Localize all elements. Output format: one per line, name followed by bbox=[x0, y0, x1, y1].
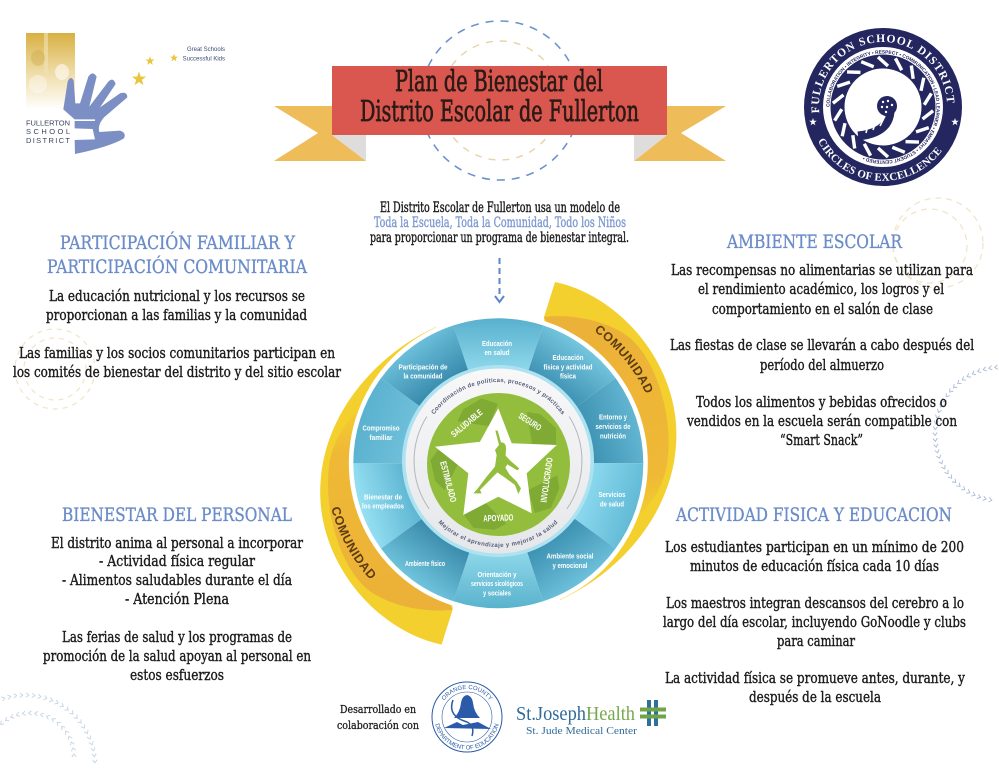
segment labels: y emocional bbox=[552, 561, 588, 570]
body text: “Smart Snack” bbox=[780, 431, 863, 449]
green circle bbox=[427, 393, 570, 536]
tagline: Successful Kids bbox=[183, 56, 225, 62]
body text: estos esfuerzos bbox=[130, 666, 224, 684]
segment labels: la comunidad bbox=[404, 372, 443, 380]
banner bbox=[332, 66, 667, 135]
segment labels: servicios de bbox=[596, 422, 630, 431]
icon: jumping figure bbox=[473, 431, 521, 494]
intro text: Toda la Escuela, Toda la Comunidad, Todo los Niños bbox=[374, 215, 626, 231]
star bbox=[435, 408, 557, 515]
segment labels: física bbox=[560, 372, 577, 380]
body text: los comités de bienestar del distrito y del sitio escolar bbox=[13, 363, 342, 381]
chart: wellness wheel bbox=[320, 282, 676, 645]
body text: Las ferias de salud y los programas de bbox=[62, 628, 292, 646]
tagline bbox=[183, 47, 225, 62]
title: Plan de Bienestar del bbox=[395, 64, 603, 98]
segment labels: en salud bbox=[484, 348, 510, 357]
district name: FULLERTON bbox=[26, 118, 70, 128]
title bbox=[360, 64, 639, 128]
credit text: colaboración con bbox=[337, 718, 419, 732]
segment labels: Ambiente social bbox=[546, 552, 594, 560]
body text: para caminar bbox=[777, 632, 856, 650]
credit text: Desarrollado en bbox=[340, 702, 416, 716]
segment labels: Compromiso bbox=[362, 424, 400, 432]
segment labels: nutrición bbox=[600, 432, 626, 440]
body text: comportamiento en el salón de clase bbox=[712, 300, 933, 318]
wheel segments bbox=[353, 318, 643, 608]
body text: La educación nutricional y los recursos se bbox=[49, 287, 305, 305]
segment labels: los empleados bbox=[362, 502, 404, 510]
body text: proporcionan a las familias y la comunidad bbox=[46, 306, 307, 324]
body text: promoción de la salud apoyan al personal en bbox=[43, 647, 311, 665]
swoosh: right bbox=[544, 282, 676, 600]
body text bbox=[663, 538, 966, 706]
logo: St. Joseph Health bbox=[516, 700, 666, 737]
icon: cross bbox=[640, 700, 666, 726]
logo: St. Joseph Health: St. Jude Medical Center bbox=[526, 725, 637, 737]
icon: hand bbox=[63, 73, 127, 154]
segment labels: Participación de bbox=[398, 362, 448, 372]
body text: Las familias y los socios comunitarios participan en bbox=[19, 344, 335, 362]
segment labels: servicios sicológicos bbox=[471, 579, 523, 588]
segment labels: Orientación y bbox=[478, 570, 517, 579]
heading: BIENESTAR DEL PERSONAL bbox=[62, 504, 292, 526]
heading: AMBIENTE ESCOLAR bbox=[726, 231, 903, 253]
seal stars bbox=[809, 118, 817, 125]
star labels: APOYADO bbox=[483, 512, 513, 524]
logo: seal Circles of Excellence bbox=[804, 28, 962, 186]
inner ring: Coordinación de políticas, procesos y prácticas bbox=[432, 378, 564, 414]
body text: - Actividad física regular bbox=[99, 552, 256, 570]
rope ring bbox=[833, 57, 933, 157]
star labels: INVOLUCRADO bbox=[539, 457, 555, 503]
segment labels: Ambiente físico bbox=[405, 559, 445, 568]
heading: PARTICIPACIÓN FAMILIAR Y bbox=[60, 231, 295, 254]
icon: bell bbox=[454, 695, 480, 718]
segment labels: Educación bbox=[482, 339, 512, 348]
title: Distrito Escolar de Fullerton bbox=[360, 94, 639, 128]
credit text bbox=[337, 702, 419, 732]
intro text bbox=[370, 200, 629, 246]
seal text bbox=[811, 34, 955, 181]
seal text: COLLABORATION • INTEGRITY • RESPECT • COMMUNICATION • LEAD LEARNER • EMPATHY • STUDENT CENTERED • bbox=[826, 50, 940, 164]
body text bbox=[43, 534, 311, 684]
star labels: SALUDABLE bbox=[449, 407, 484, 439]
district name: DISTRICT bbox=[26, 136, 70, 145]
segment labels: de salud bbox=[600, 500, 624, 508]
body text bbox=[670, 261, 974, 449]
panel: actividad fisica bbox=[663, 504, 966, 706]
district name: SCHOOL bbox=[26, 127, 70, 136]
ribbon tails bbox=[274, 106, 366, 161]
tagline: Great Schools bbox=[187, 47, 225, 53]
segment labels: Bienestar de bbox=[364, 492, 402, 502]
seal text: FULLERTON SCHOOL DISTRICT bbox=[811, 34, 955, 114]
intro text: para proporcionar un programa de bienestar integral. bbox=[370, 230, 629, 246]
body text bbox=[13, 287, 342, 381]
star labels: ESTIMULADO bbox=[438, 460, 459, 503]
intro text: El Distrito Escolar de Fullerton usa un modelo de bbox=[380, 200, 620, 216]
seal text: CIRCLES OF EXCELLENCE bbox=[819, 138, 942, 181]
segment labels: y sociales bbox=[483, 588, 511, 598]
arrow: down to wheel bbox=[495, 258, 504, 302]
district name bbox=[26, 118, 70, 145]
segment labels: Servicios bbox=[598, 490, 626, 499]
heading: PARTICIPACIÓN COMUNITARIA bbox=[47, 255, 307, 278]
body text: - Atención Plena bbox=[125, 590, 229, 608]
logo: Orange County Department of Education: ORANGE COUNTY bbox=[442, 684, 493, 700]
star labels bbox=[438, 407, 555, 524]
segment labels: Educación bbox=[552, 353, 584, 362]
logo: Orange County Department of Education bbox=[432, 682, 502, 752]
label: comunidad left: COMUNIDAD bbox=[332, 507, 376, 578]
inner ring: Mejorar el aprendizaje y mejorar la salud bbox=[438, 520, 558, 548]
panel: participacion familiar bbox=[13, 231, 342, 381]
star labels: SEGURO bbox=[517, 411, 543, 433]
segment labels bbox=[362, 339, 630, 598]
segment labels: Entorno y bbox=[599, 412, 628, 422]
body text: El distrito anima al personal a incorporar bbox=[51, 534, 304, 552]
swoosh: left bbox=[320, 327, 453, 645]
photo panel bbox=[26, 33, 75, 110]
body text: - Alimentos saludables durante el día bbox=[62, 571, 292, 589]
logo: St. Joseph Health: St.JosephHealth bbox=[516, 703, 635, 725]
inner ring bbox=[402, 365, 594, 557]
segment labels: familiar bbox=[370, 433, 393, 442]
body text: período del almuerzo bbox=[760, 356, 884, 374]
panel: ambiente escolar bbox=[670, 231, 974, 449]
label: comunidad right: COMUNIDAD bbox=[596, 326, 652, 392]
segment labels: física y actividad bbox=[544, 362, 593, 372]
title ribbon bbox=[274, 64, 726, 161]
logo: Orange County Department of Education: DEPARTMENT OF EDUCATION bbox=[435, 723, 499, 750]
background dashed circles bbox=[15, 21, 983, 409]
body text: minutos de educación física cada 10 días bbox=[690, 557, 939, 575]
heading bbox=[47, 231, 307, 278]
swirl shading bbox=[421, 394, 566, 541]
panel: bienestar del personal bbox=[43, 504, 311, 684]
icon: stars bbox=[132, 54, 178, 85]
icon: cornucopia bbox=[858, 96, 897, 136]
logo: Fullerton School District hand bbox=[26, 33, 225, 154]
body text: después de la escuela bbox=[749, 688, 881, 706]
